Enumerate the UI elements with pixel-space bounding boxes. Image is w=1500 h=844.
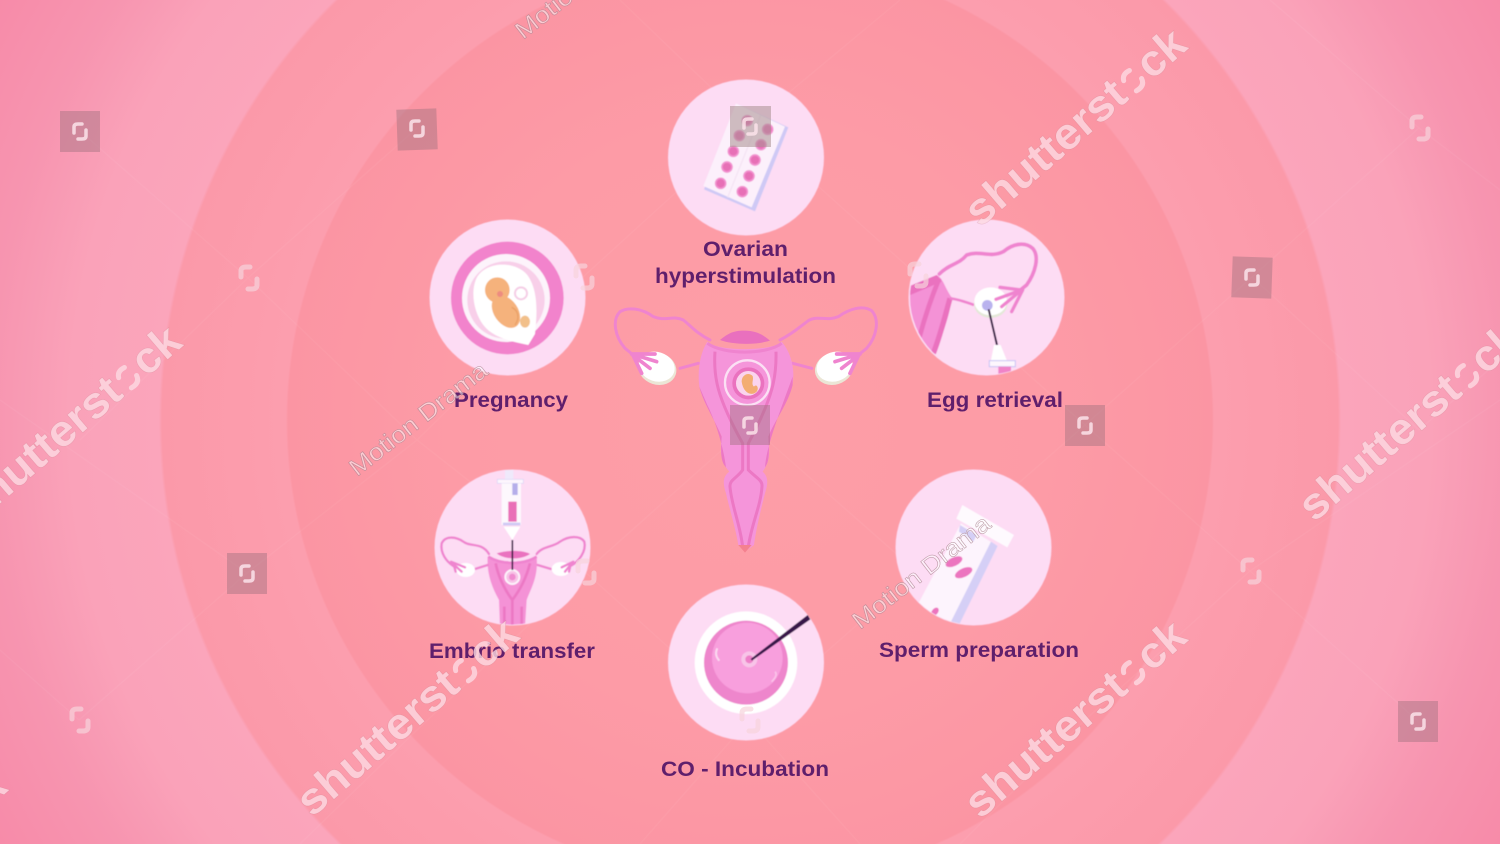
watermark: Motion Drama: Motion Drama	[344, 357, 494, 482]
icon: fetus in womb	[451, 242, 564, 354]
label: pregnancy: Pregnancy	[454, 388, 568, 412]
step circle: embryo transfer	[434, 470, 590, 627]
ovaries	[632, 347, 860, 390]
label: ovarian hyperstimulation: hyperstimulation	[655, 264, 836, 288]
label: ovarian hyperstimulation	[655, 237, 836, 288]
icon: blister pack of pills	[703, 103, 788, 211]
watermark: Motion Drama: Motion Drama	[847, 510, 997, 635]
step circle: co-incubation	[668, 584, 824, 740]
label: sperm preparation: Sperm preparation	[879, 638, 1079, 662]
label: egg retrieval: Egg retrieval	[927, 388, 1063, 412]
watermark: small square logos	[60, 106, 1438, 742]
icon: ovary and retrieval needle	[900, 244, 1036, 377]
watermark: shutterstock wordmarks: shutterst	[955, 661, 1137, 828]
watermark: shutterstock wordmarks: shutterst	[955, 69, 1137, 236]
fallopian tubes	[615, 308, 876, 368]
step circle: sperm preparation	[896, 470, 1052, 627]
watermark: shutterstock wordmarks: ck	[121, 315, 191, 385]
watermark: small outlined logos	[72, 117, 1428, 731]
label: embryo transfer: Embrio transfer	[429, 639, 596, 663]
watermark: Motion Drama	[344, 0, 997, 635]
watermark: shutterstock wordmarks: ck	[1126, 18, 1196, 88]
uterus body	[699, 342, 793, 552]
icon: sperm sample tube	[917, 505, 1014, 627]
watermark: shutterstock wordmarks: ck	[458, 608, 528, 678]
watermark: shutterstock wordmarks: shutterst	[287, 659, 469, 826]
step circle: ovarian hyperstimulation	[668, 80, 824, 236]
icon: uterus and transfer syringe	[441, 470, 585, 627]
central illustration: uterus with embryo	[615, 308, 876, 553]
embryo	[725, 360, 770, 405]
step circle: pregnancy	[430, 220, 586, 376]
label: co-incubation: CO - Incubation	[661, 757, 829, 781]
watermark: shutterstock wordmarks: shutterst	[1289, 364, 1471, 531]
watermark: shutterstock wordmarks: ck	[1126, 610, 1196, 680]
step circle: egg retrieval	[900, 220, 1064, 377]
label: ovarian hyperstimulation: Ovarian	[703, 237, 788, 261]
icon: egg cell with injection needle	[695, 611, 810, 714]
